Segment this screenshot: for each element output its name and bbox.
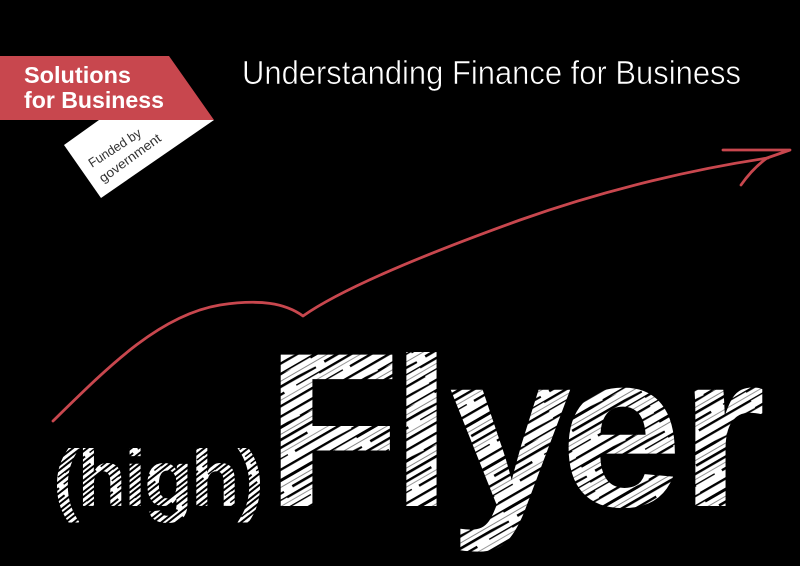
red banner: for Business: [24, 87, 164, 113]
red banner: Solutions: [24, 62, 131, 88]
l top trim: [400, 330, 445, 352]
wordmark: (high): (high): [53, 434, 264, 523]
white tag: funded by government: government: [96, 130, 164, 185]
white tag: funded by government: [64, 120, 214, 198]
wordmark: Flyer: Flyer: [266, 307, 766, 553]
title: Understanding Finance for Business: [242, 54, 741, 91]
logo: Solutions for Business: [0, 56, 214, 198]
arrow: rising growth line: [53, 150, 790, 421]
red banner: [0, 56, 214, 120]
white tag: funded by government: Funded by: [85, 125, 144, 171]
